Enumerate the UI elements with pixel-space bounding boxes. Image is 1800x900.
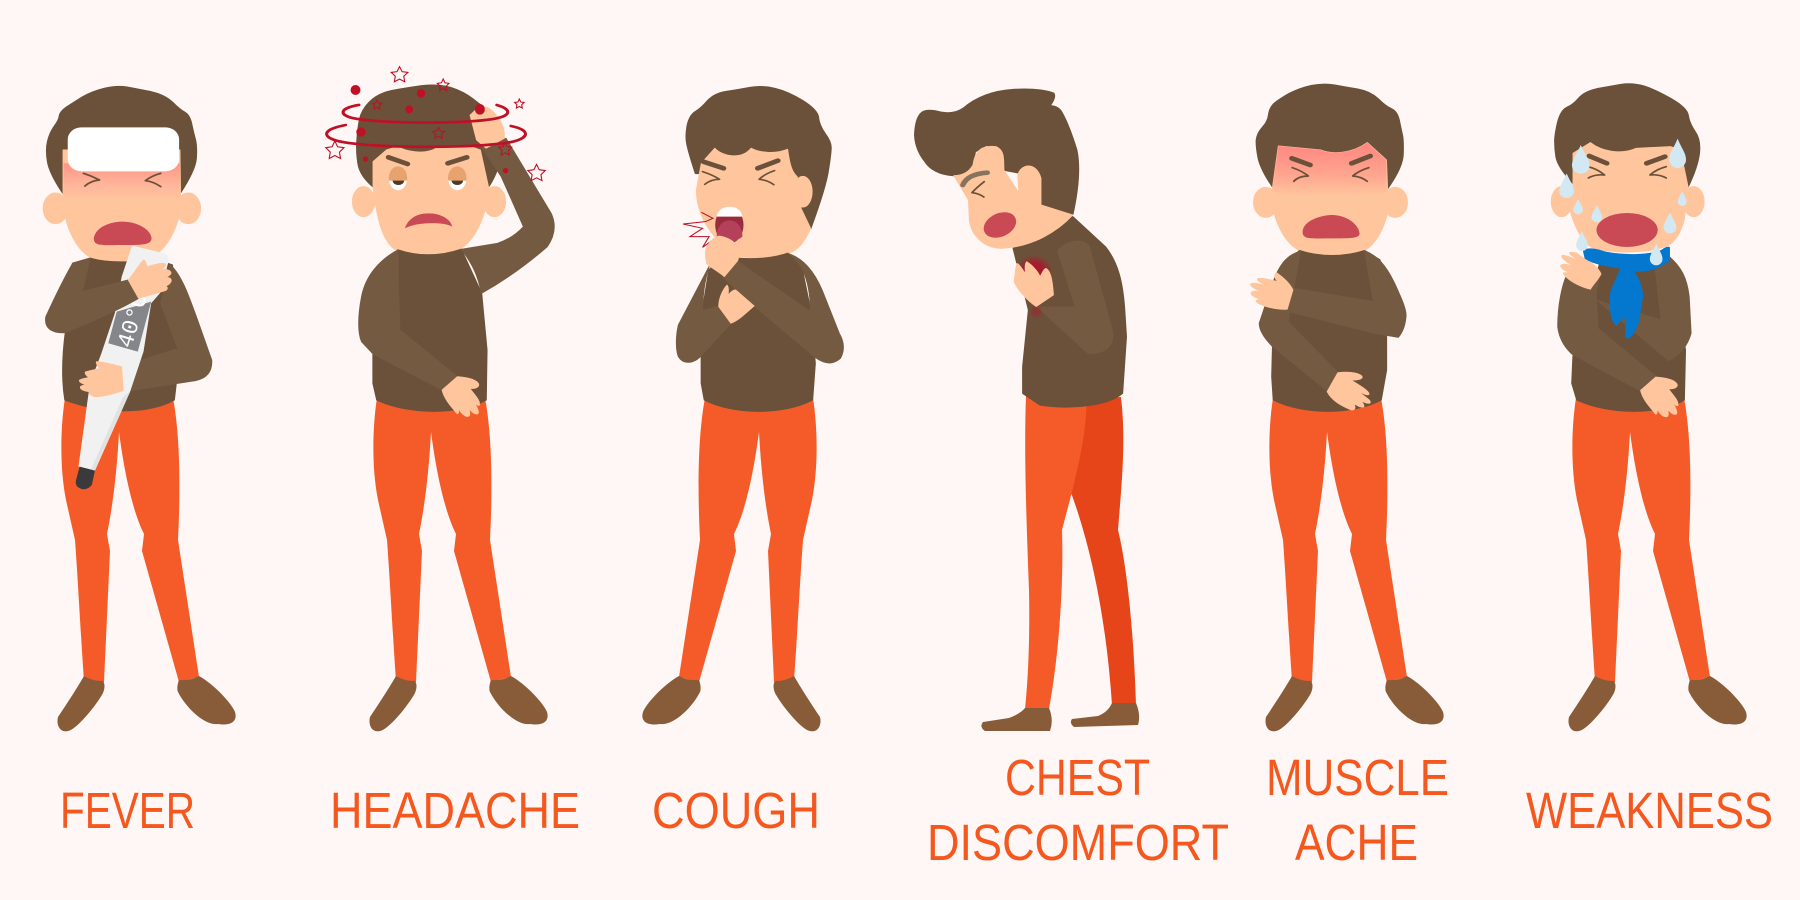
thermometer [78, 246, 169, 471]
cough burst [683, 212, 713, 247]
thermometer edge shade [91, 392, 130, 471]
ears [1254, 187, 1407, 217]
left sleeve [1259, 251, 1338, 392]
open mouth [715, 207, 744, 243]
right sleeve [722, 254, 843, 363]
back shoe [1071, 703, 1139, 727]
ears [1551, 187, 1704, 217]
upper body: fever [43, 87, 212, 489]
squinting eyes [703, 171, 775, 185]
dizziness dots [351, 85, 508, 173]
upper hand [128, 260, 171, 298]
figure: cough [642, 87, 843, 731]
tired eyes [389, 166, 467, 190]
left sleeve [1558, 270, 1656, 391]
dizziness rings [327, 105, 526, 147]
torso [373, 249, 487, 411]
ear [794, 176, 812, 207]
mouth [94, 222, 152, 245]
right sleeve [1289, 251, 1406, 337]
forehead flush [1273, 143, 1387, 197]
lower hand [1640, 377, 1678, 417]
mouth [1596, 213, 1658, 247]
eyebrows [1292, 156, 1370, 165]
dizziness stars [326, 67, 545, 181]
label: muscle ache: MUSCLE [1266, 749, 1449, 806]
label: muscle ache [1266, 749, 1449, 871]
scarf [1583, 247, 1670, 339]
ears [43, 193, 201, 224]
thermometer reading: 40°C [113, 291, 154, 351]
front leg [1025, 395, 1087, 709]
cold compress [68, 127, 179, 171]
hand at mouth [705, 236, 739, 277]
figure: weakness [1551, 84, 1747, 731]
legs and shoes: headache [369, 398, 548, 731]
torso [1272, 251, 1386, 411]
eyebrows [1589, 156, 1665, 163]
hand on chest [719, 285, 754, 323]
right sleeve [122, 265, 212, 391]
torso [63, 258, 180, 411]
left sleeve [46, 258, 139, 333]
thermometer tip [76, 467, 95, 489]
raised arm [461, 138, 554, 293]
eyebrow [963, 173, 987, 185]
upper body: headache [326, 67, 554, 417]
figure: fever [43, 87, 236, 731]
hair [1555, 84, 1699, 187]
sweat drops [1559, 139, 1687, 265]
squinting eyes [83, 173, 161, 187]
upper body: weakness [1551, 84, 1704, 417]
squinting eyes [1292, 168, 1369, 181]
label: chest discomfort: DISCOMFORT [927, 814, 1229, 871]
upper body: muscle ache [1251, 84, 1407, 411]
upper body: cough [676, 87, 843, 411]
hand on chest [1014, 262, 1053, 307]
face [954, 146, 1073, 248]
face [1273, 143, 1388, 256]
arm hand [1251, 273, 1293, 309]
torso [701, 253, 815, 411]
figure: headache [326, 67, 554, 731]
fever arm and hands [46, 258, 171, 397]
mouth [1303, 215, 1360, 238]
legs and shoes: cough [642, 398, 821, 731]
lower hand [1327, 372, 1370, 410]
hair [915, 89, 1078, 214]
eyebrows [703, 161, 778, 168]
hair [686, 87, 831, 228]
forehead flush [64, 163, 180, 202]
figure: chest discomfort [915, 89, 1139, 731]
right sleeve [1597, 257, 1691, 361]
hair [357, 85, 503, 187]
face [373, 147, 489, 255]
squinting eyes [1588, 167, 1666, 178]
face [1569, 143, 1688, 252]
figure: muscle ache [1251, 84, 1444, 731]
back leg [1060, 397, 1136, 705]
front shoe [981, 708, 1052, 731]
legs and shoes: fever [57, 398, 236, 731]
thermometer display [108, 302, 151, 352]
mouth [405, 213, 452, 228]
lower hand [79, 362, 123, 397]
hair [47, 87, 196, 193]
face [696, 148, 810, 258]
chest pain glow [1016, 255, 1053, 319]
left sleeve [676, 267, 731, 362]
legs and shoes: weakness [1568, 398, 1747, 731]
sleeve [1036, 240, 1113, 354]
upper hand [1561, 252, 1601, 289]
face [63, 150, 181, 262]
lower hand [442, 377, 480, 417]
upper body: chest discomfort [915, 89, 1126, 407]
hand on head [470, 106, 504, 148]
mouth [978, 207, 1022, 243]
eyebrows [388, 157, 467, 164]
label: fever: FEVER [60, 782, 195, 839]
label: chest discomfort [927, 749, 1229, 871]
hair [1257, 84, 1403, 188]
label: muscle ache: ACHE [1295, 814, 1418, 871]
label: headache: HEADACHE [330, 782, 580, 839]
torso [1572, 263, 1685, 411]
lowered arm [359, 250, 457, 390]
label: chest discomfort: CHEST [1005, 749, 1150, 806]
ears [352, 187, 506, 217]
squinting eye [972, 182, 984, 197]
legs and shoes: muscle ache [1265, 398, 1444, 731]
label: cough: COUGH [652, 782, 820, 839]
torso [1013, 217, 1126, 407]
